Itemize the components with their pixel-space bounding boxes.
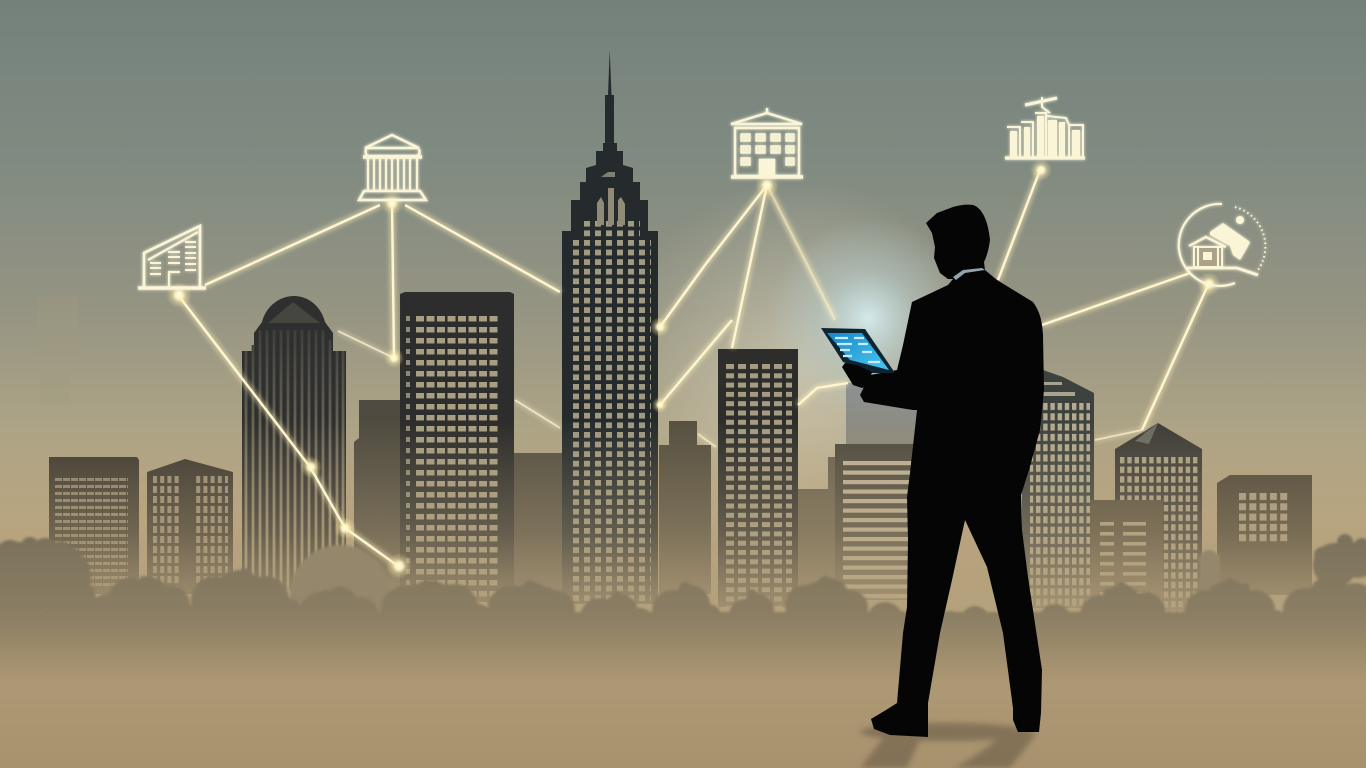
plain building back left bbox=[354, 400, 402, 595]
icon: city block with crane bbox=[1005, 97, 1085, 158]
icon: slanted roof office bbox=[138, 226, 206, 288]
warm background glow bbox=[600, 170, 1000, 570]
plain tower right of skyscraper bbox=[659, 421, 711, 594]
tablet light halo bbox=[768, 218, 968, 418]
icon: classical bank bbox=[359, 135, 426, 200]
far right building bbox=[1217, 475, 1312, 595]
low plain buildings bbox=[798, 457, 840, 597]
city skyline bbox=[0, 50, 1366, 632]
line strokes bbox=[178, 170, 1208, 566]
connection lines behind buildings bbox=[338, 331, 1142, 447]
haze over building bases bbox=[0, 420, 1366, 632]
building 1 bbox=[49, 457, 139, 594]
line glow bbox=[178, 170, 1208, 566]
man silhouette bbox=[821, 205, 1044, 737]
pale trees behind bbox=[290, 545, 1220, 645]
ground shadows bbox=[860, 723, 1037, 768]
tablet bbox=[821, 328, 895, 373]
suit and body bbox=[860, 205, 1044, 737]
plain building between towers bbox=[512, 453, 564, 593]
striped building bbox=[835, 444, 915, 600]
low right building bbox=[1090, 500, 1163, 610]
domed tower bbox=[242, 296, 346, 590]
glowing nodes bbox=[166, 159, 1221, 579]
icon: house in circle bbox=[1179, 204, 1265, 286]
tall block building bbox=[400, 292, 514, 604]
roofed right tower bbox=[1115, 423, 1202, 616]
right tower bbox=[1022, 370, 1094, 608]
pale back tower bbox=[846, 383, 917, 445]
central skyscraper with spire bbox=[562, 50, 658, 604]
tree line bbox=[0, 534, 1366, 682]
network lines bbox=[166, 159, 1221, 579]
icon: flat roofed building bbox=[731, 108, 803, 177]
block building centre bbox=[718, 349, 798, 607]
faint background squares bbox=[38, 296, 78, 404]
building 2 bbox=[147, 459, 233, 594]
shirt collar bbox=[953, 268, 985, 280]
hand bbox=[842, 363, 872, 388]
